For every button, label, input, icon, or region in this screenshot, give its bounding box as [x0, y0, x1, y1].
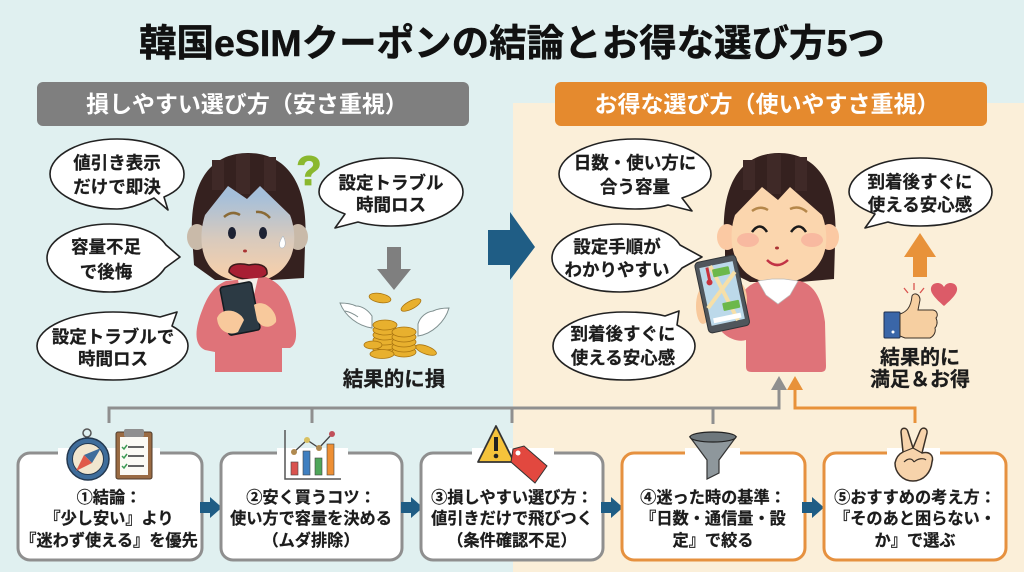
callout: setup trouble right: 時間ロス	[356, 195, 426, 215]
callout: ready on arrival right	[849, 158, 992, 228]
callout: days usage: 日数・使い方に	[574, 153, 696, 173]
callout: setup trouble left	[37, 312, 188, 380]
callout: ready on arrival right: 到着後すぐに	[868, 172, 972, 192]
panel: card 1: 『迷わず使える』を優先	[20, 531, 198, 550]
callout: days usage: 合う容量	[600, 177, 670, 197]
panel: card 4: 定』で絞る	[673, 532, 753, 550]
callout: capacity: 容量不足	[71, 237, 141, 257]
callout: setup trouble left: 時間ロス	[78, 349, 148, 369]
arrow: card 1 to 2	[200, 497, 222, 518]
heading: left header: 損しやすい選び方（安さ重視）	[86, 91, 408, 117]
callout: ready on arrival right: 使える安心感	[868, 195, 972, 215]
icon: coins with wings	[340, 292, 449, 358]
panel: card 1: ①結論：	[77, 488, 141, 507]
arrow: down grey	[377, 247, 411, 290]
panel: card 2: （ムダ排除）	[262, 531, 360, 550]
arrow: centre blue	[488, 212, 535, 280]
panel: card 5: 『そのあと困らない・	[834, 510, 996, 528]
icon: question mark: ?	[296, 147, 322, 194]
icon: thumbs up with heart	[884, 283, 957, 338]
callout: setup trouble left: 設定トラブルで	[52, 327, 174, 347]
panel: card 5: ⑤おすすめの考え方：	[834, 488, 996, 507]
callout: discount: だけで即決	[73, 177, 161, 197]
callout: capacity	[47, 224, 180, 292]
label: result satisfied: 満足＆お得	[870, 368, 970, 391]
panel: background right	[513, 103, 1024, 572]
panel: card 3: （条件確認不足）	[447, 531, 577, 550]
callout: days usage	[559, 139, 711, 211]
callout: ready on arrival left: 到着後すぐに	[570, 324, 676, 344]
heading: right header: お得な選び方（使いやすさ重視）	[594, 91, 940, 117]
panel: card 3	[421, 448, 603, 560]
icon: warning triangle	[478, 426, 514, 462]
label: result satisfied: 結果的に	[880, 346, 960, 369]
icon: bar and line chart	[285, 430, 341, 479]
callout: capacity: で後悔	[80, 262, 133, 282]
arrow: card 3 to 4	[601, 497, 623, 518]
callout: discount: 値引き表示	[73, 153, 161, 173]
label: result loss: 結果的に損	[343, 368, 446, 391]
panel: card 1	[18, 448, 202, 560]
icon: victory hand	[895, 428, 933, 481]
label: result satisfied	[870, 346, 970, 391]
panel: card 4: 『日数・通信量・設	[640, 509, 786, 528]
icon: compass	[67, 429, 109, 480]
panel: card 2: 使い方で容量を決める	[230, 509, 392, 528]
callout: discount	[50, 139, 184, 210]
panel: card 5: か』で選ぶ	[875, 532, 955, 550]
arrow: card 2 to 3	[401, 497, 423, 518]
panel: card 4	[622, 448, 805, 560]
icon: price tag	[511, 446, 547, 483]
arrow: card 4 to 5	[802, 497, 824, 518]
callout: setup steps	[552, 224, 702, 292]
connector: grey lines to result	[109, 376, 787, 424]
panel: card 2	[221, 448, 402, 560]
callout: setup trouble right: 設定トラブル	[338, 173, 444, 193]
panel: card 3: ③損しやすい選び方：	[431, 488, 593, 507]
title: 韓国eSIMクーポンの結論とお得な選び方5つ	[139, 22, 885, 64]
heading: left header	[37, 82, 469, 126]
panel: card 2: ②安く買うコツ：	[246, 488, 376, 507]
panel: card 5	[824, 448, 1006, 560]
panel: card 4: ④迷った時の基準：	[640, 488, 786, 507]
callout: setup steps: 設定手順が	[573, 237, 661, 257]
callout: ready on arrival left	[553, 311, 695, 380]
heading: right header	[555, 82, 987, 126]
callout: setup trouble right	[319, 158, 463, 228]
callout: setup steps: わかりやすい	[564, 260, 670, 280]
icon: funnel	[690, 432, 736, 479]
connector: orange line to result	[787, 376, 915, 423]
callout: ready on arrival left: 使える安心感	[571, 348, 675, 368]
illustration: happy woman	[694, 153, 839, 372]
panel: card 3: 値引きだけで飛びつく	[431, 509, 593, 528]
arrow: up orange	[904, 233, 936, 277]
icon: clipboard	[116, 429, 152, 479]
illustration: worried woman	[187, 153, 308, 372]
panel: card 1: 『少し安い』より	[44, 509, 174, 528]
